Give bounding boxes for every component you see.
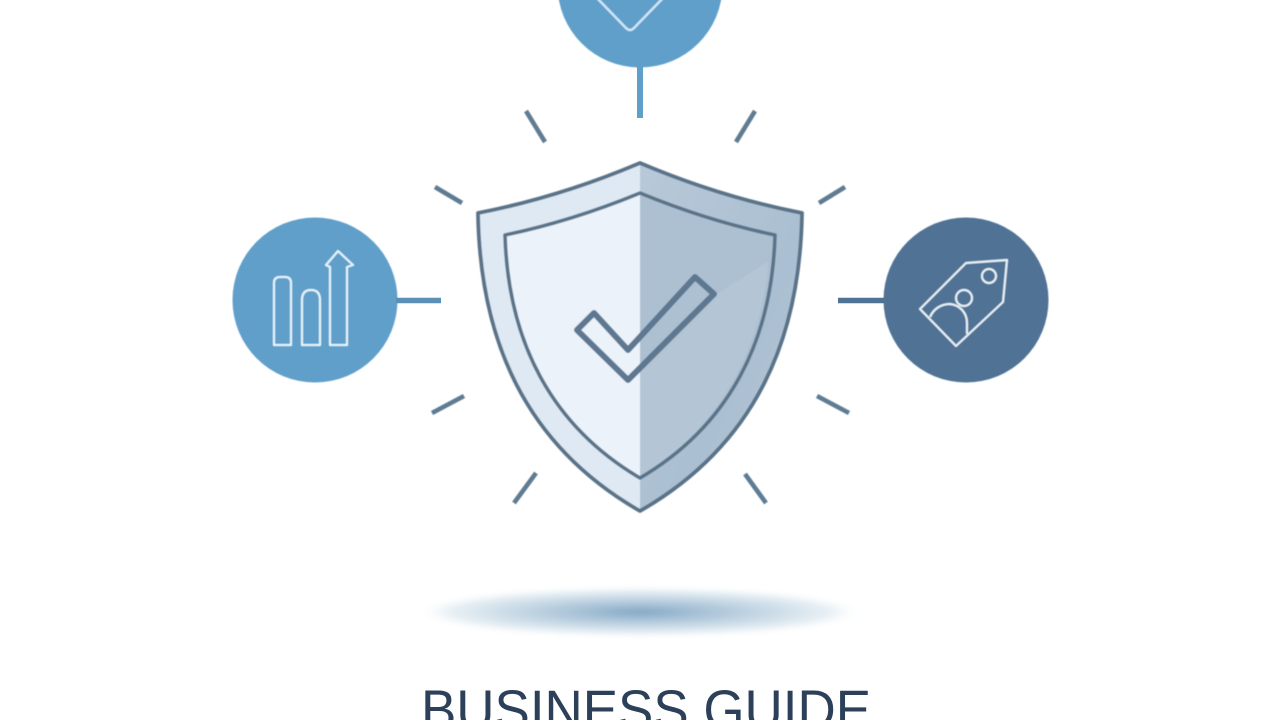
icon: bar chart with arrow <box>274 251 353 345</box>
left circle: growth chart <box>232 218 398 382</box>
top connector <box>637 66 643 118</box>
right circle: tag <box>884 218 1048 382</box>
ground shadow <box>415 587 865 637</box>
top circle icon <box>558 0 722 68</box>
shield inner right half <box>640 193 775 478</box>
check drop shadow <box>640 262 768 478</box>
left connector <box>396 298 441 303</box>
shield outer right half <box>640 163 802 511</box>
radiating ticks <box>432 111 849 503</box>
shield outer left half <box>478 163 640 511</box>
icon: diamond check <box>597 0 663 30</box>
shield outlines <box>478 163 802 511</box>
checkmark <box>577 277 714 380</box>
right connector <box>838 298 885 303</box>
shield inner left half <box>505 193 640 478</box>
icon: price tag with person <box>920 260 1007 346</box>
shield <box>478 163 802 511</box>
